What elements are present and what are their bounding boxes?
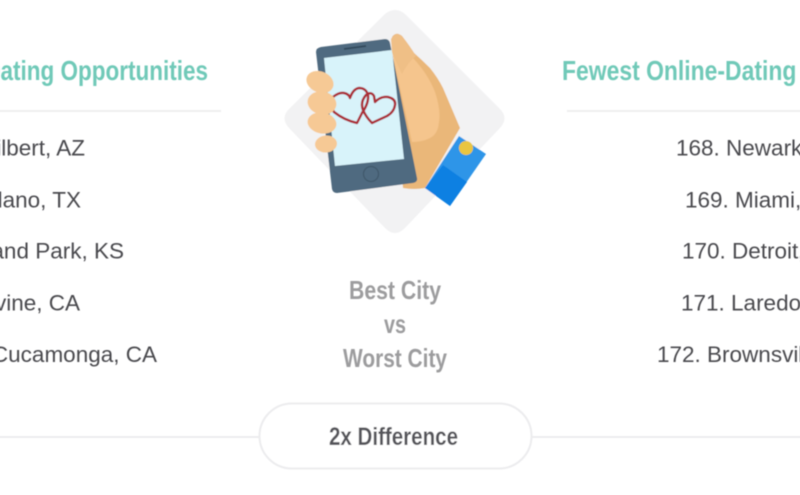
hearts (331, 88, 395, 123)
difference pill: 2x Difference (329, 423, 458, 451)
cufflink (459, 141, 473, 155)
icon: hand holding phone with hearts (284, 10, 504, 233)
phone body (316, 39, 417, 193)
comparison label: Worst City (343, 343, 447, 373)
hand (392, 34, 460, 189)
cuff (425, 136, 486, 206)
diamond background (284, 10, 504, 233)
panel: fewest opportunities (562, 55, 800, 367)
speaker (344, 46, 366, 49)
panel: most opportunities (0, 55, 221, 367)
comparison label: vs (384, 309, 406, 339)
screen (324, 50, 404, 166)
comparison label (343, 275, 447, 373)
thumb (391, 34, 416, 74)
comparison label: Best City (349, 275, 441, 305)
list: best cities (0, 136, 157, 367)
hand highlight (392, 52, 440, 142)
difference pill (0, 404, 800, 468)
fingers (303, 67, 339, 153)
home button (364, 166, 378, 182)
list: worst cities (657, 136, 800, 367)
